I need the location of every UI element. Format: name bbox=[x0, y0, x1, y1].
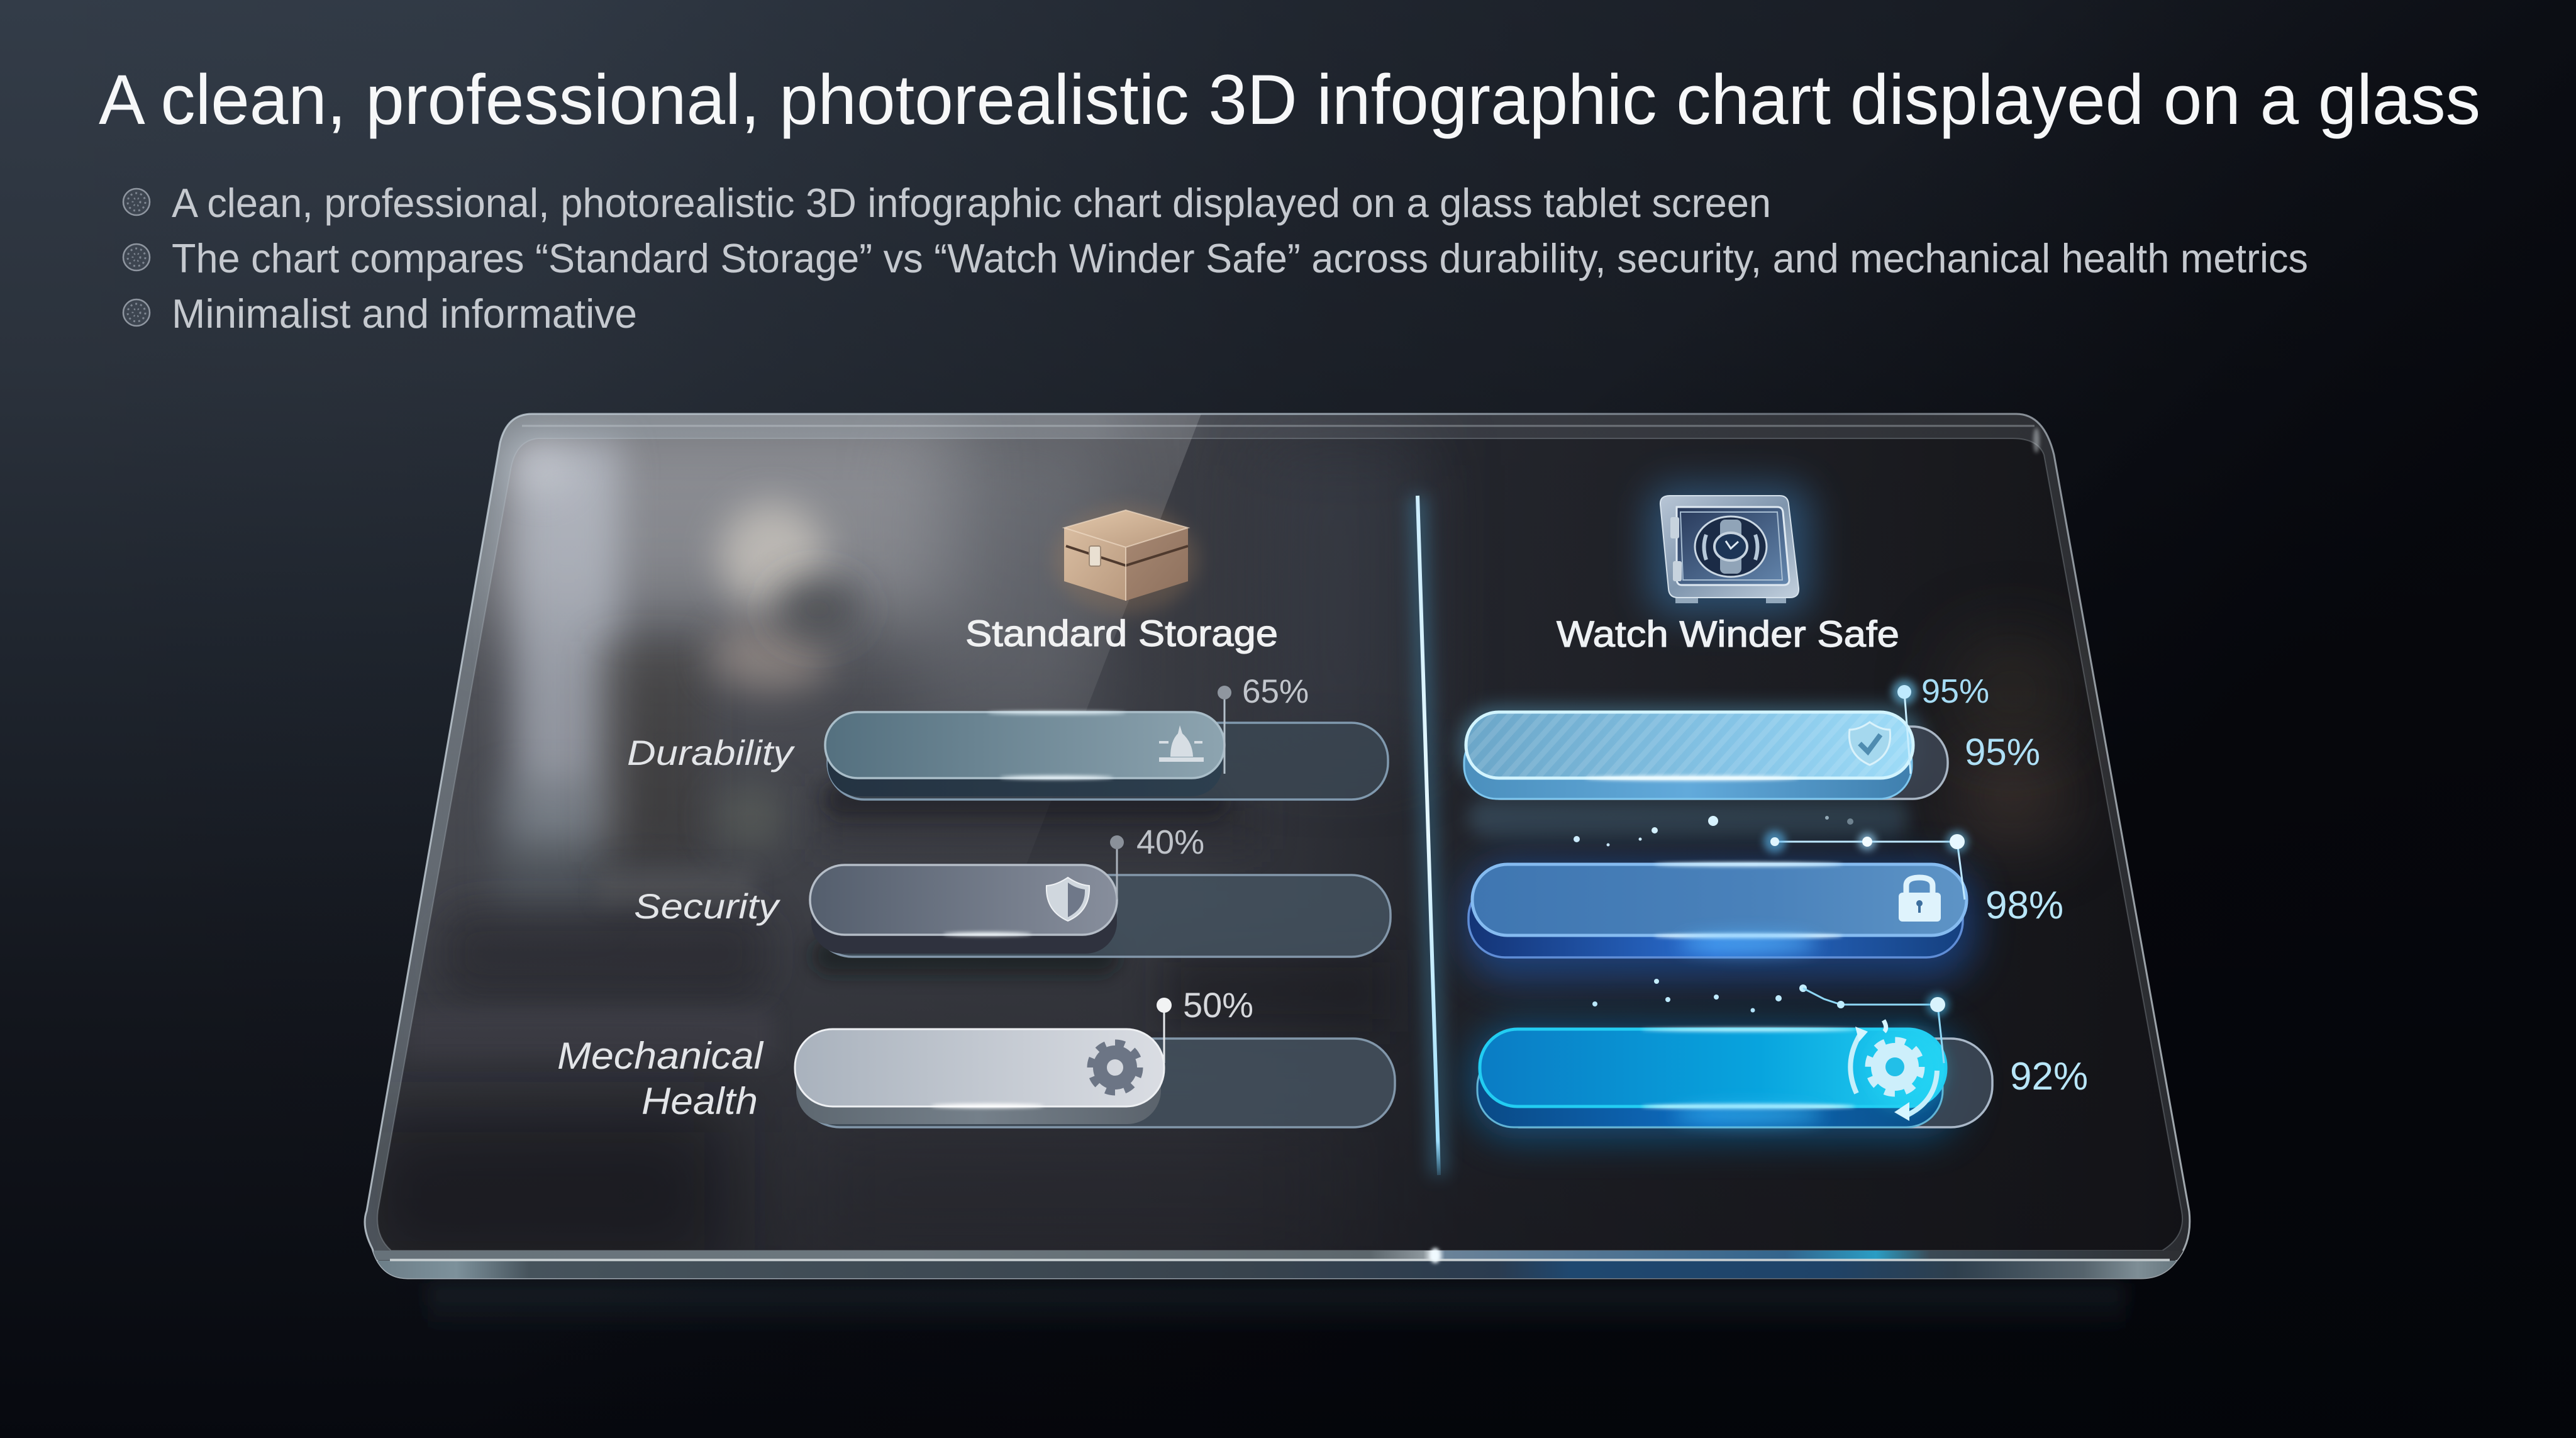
value label top bbox=[1892, 672, 1989, 774]
icon: watch winder safe bbox=[1648, 484, 1811, 616]
glass bottom bevel bbox=[365, 1248, 2192, 1279]
connector with nodes bbox=[1803, 988, 1949, 1063]
icon: shield bbox=[1046, 878, 1089, 921]
track bbox=[828, 723, 1388, 800]
icon: padlock bbox=[1899, 878, 1941, 922]
value label top: 95% bbox=[1921, 672, 1989, 710]
column heading: watch winder safe: Watch Winder Safe bbox=[1557, 614, 1899, 655]
bullet 1: A clean, professional, photorealistic 3D infographic chart displayed on a glass tablet screen bbox=[172, 180, 1771, 226]
row label: durability: Durability bbox=[627, 733, 795, 772]
bar: watch winder security 98% bbox=[1465, 830, 2063, 981]
track bbox=[1479, 1039, 1992, 1127]
column heading: standard storage: Standard Storage bbox=[965, 613, 1278, 654]
value label: 40% bbox=[1136, 823, 1204, 861]
particles: upper bbox=[1574, 816, 1853, 847]
bullet 3: Minimalist and informative bbox=[172, 291, 637, 337]
watch in winder bbox=[1695, 516, 1767, 577]
bar body bbox=[1464, 730, 1912, 799]
bar body bbox=[828, 730, 1223, 796]
track bbox=[813, 875, 1391, 957]
particles: lower bbox=[1592, 979, 1807, 1013]
glass rim band bbox=[365, 414, 2190, 1278]
title: A clean, professional, photorealistic 3D infographic chart displayed on a glass bbox=[99, 60, 2480, 139]
tablet outline bbox=[365, 414, 2190, 1278]
glass diagonal reflection bbox=[455, 415, 1201, 789]
bullet 2: The chart compares “Standard Storage” vs “Watch Winder Safe” across durability, security, and mechanical health metrics bbox=[172, 235, 2308, 281]
row label: mechanical health: Health bbox=[641, 1080, 758, 1122]
bar face bbox=[1480, 1029, 1946, 1106]
bar: watch winder mechanical health 92% bbox=[1472, 988, 2088, 1139]
bar face bbox=[795, 1029, 1164, 1106]
value label: 98% bbox=[1985, 884, 2063, 927]
bar body bbox=[1477, 1051, 1943, 1127]
value label bbox=[1110, 823, 1204, 900]
value label side: 95% bbox=[1965, 731, 2040, 773]
icon: cardboard box bbox=[1053, 506, 1198, 613]
icon: bell cloche bbox=[1159, 725, 1204, 762]
bar: standard durability 65% bbox=[824, 673, 1388, 818]
bar face bbox=[1466, 712, 1913, 778]
bar face bbox=[825, 712, 1224, 778]
center divider bbox=[1418, 496, 1439, 1175]
value label bbox=[1218, 673, 1309, 774]
bar: standard mechanical health 50% bbox=[795, 985, 1395, 1127]
bar body bbox=[1468, 881, 1963, 957]
value label bbox=[1157, 985, 1253, 1063]
bar body bbox=[811, 887, 1117, 954]
icon: rotating gear bbox=[1850, 1020, 1937, 1121]
row label: mechanical health: Mechanical bbox=[557, 1035, 764, 1077]
value label: 50% bbox=[1183, 985, 1253, 1025]
blurred room behind glass bbox=[352, 403, 2201, 1283]
bullet list bbox=[123, 180, 2308, 337]
reflection under tablet bbox=[428, 1283, 2126, 1334]
value label: 92% bbox=[2010, 1055, 2088, 1098]
bar: standard security 40% bbox=[810, 823, 1391, 975]
bar body bbox=[796, 1051, 1161, 1124]
glass tablet panel bbox=[352, 403, 2201, 1283]
value label: 65% bbox=[1242, 673, 1309, 710]
connector with nodes bbox=[1763, 830, 1968, 900]
bar face bbox=[810, 865, 1117, 935]
icon: shield check bbox=[1849, 722, 1890, 765]
bar: watch winder durability 95% bbox=[1459, 672, 2040, 837]
row label: mechanical health bbox=[557, 1035, 764, 1122]
track bbox=[799, 1039, 1395, 1127]
track bbox=[1465, 727, 1948, 799]
row label: security: Security bbox=[634, 886, 780, 926]
bar face bbox=[1472, 864, 1967, 935]
icon: gear bbox=[1091, 1044, 1139, 1091]
